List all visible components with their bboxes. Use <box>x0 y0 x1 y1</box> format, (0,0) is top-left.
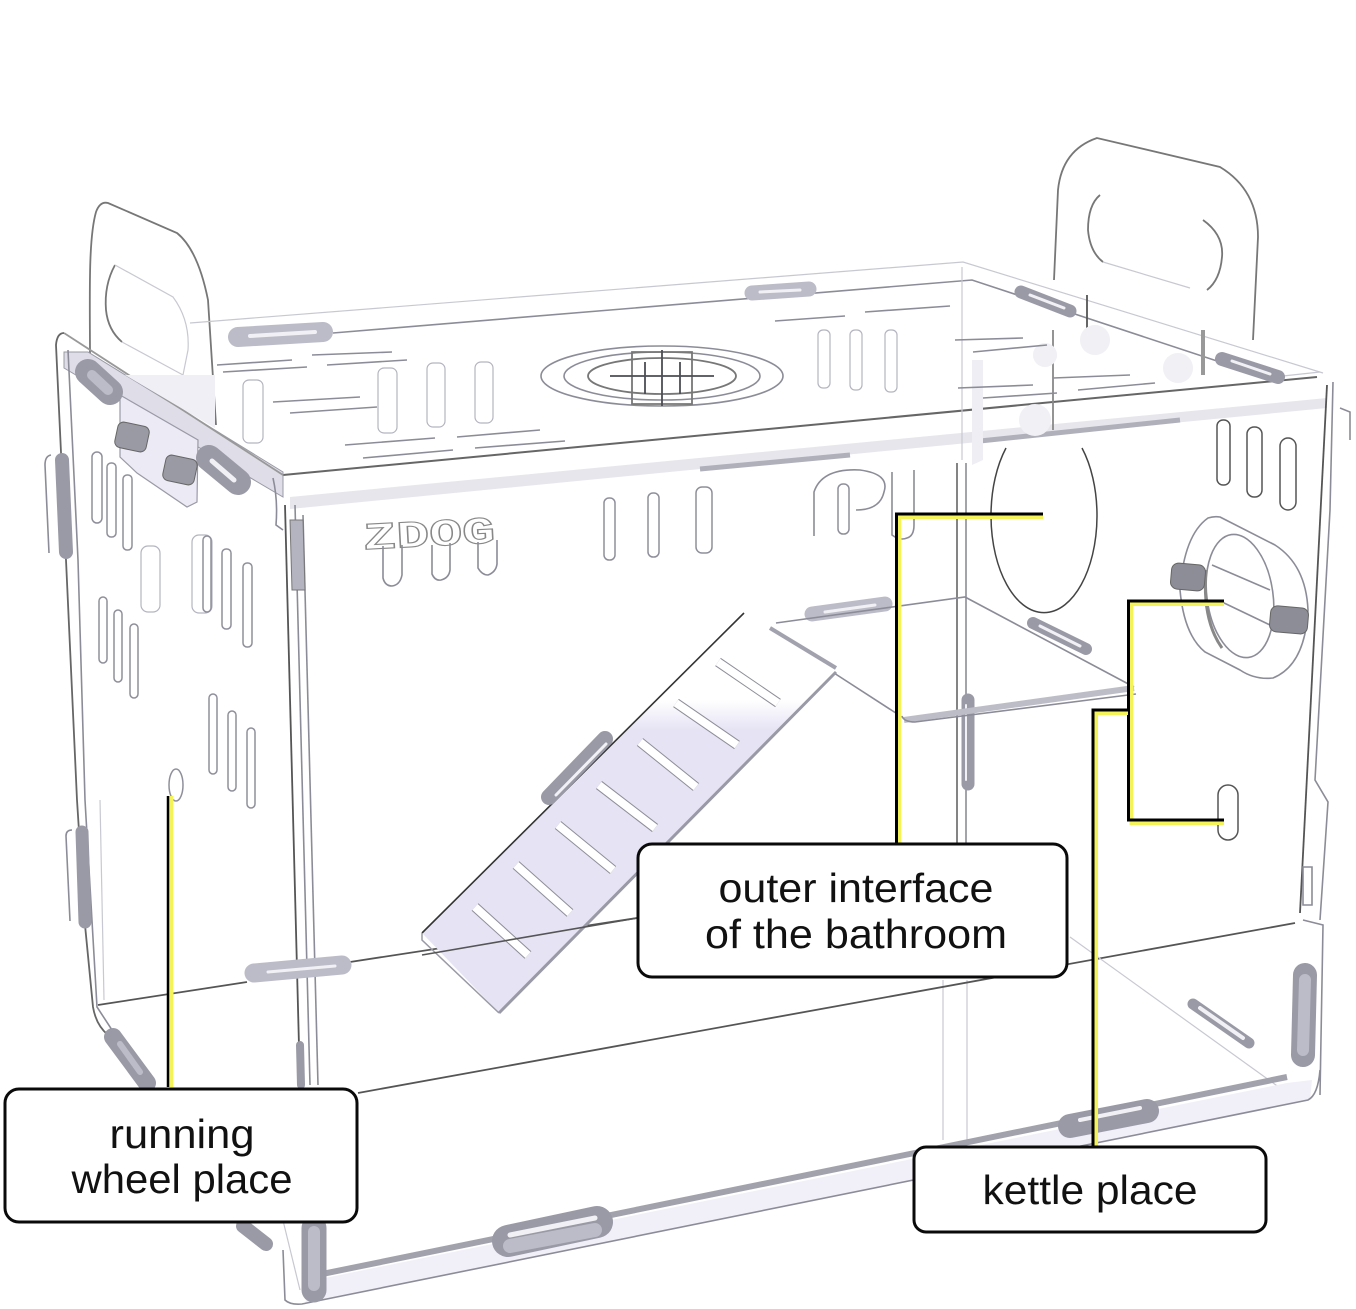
lid front edge <box>290 398 1327 509</box>
vent pattern on lid <box>217 306 1155 458</box>
lid tabs <box>238 289 1278 377</box>
lid left edge <box>64 352 283 497</box>
rear corner posts <box>943 267 1203 1140</box>
callout: running wheel place: wheel place <box>70 1156 292 1202</box>
bracket screws <box>114 421 198 486</box>
callout: running wheel place <box>5 1089 357 1222</box>
pointer: running wheel place <box>168 796 171 1087</box>
ZDOG logo and front vents: ZDOG <box>362 512 496 561</box>
lid back edges <box>190 262 1323 373</box>
callout: outer interface of the bathroom <box>638 844 1067 977</box>
bathroom opening <box>991 448 1097 613</box>
upper left tabs <box>62 372 238 1083</box>
ZDOG logo and front vents <box>362 470 914 586</box>
ramp tab <box>549 739 606 797</box>
pointer: outer interface of the bathroom <box>896 514 1043 845</box>
ramp <box>422 613 836 1013</box>
pointer: kettle place <box>1093 710 1128 1150</box>
right wall <box>1300 382 1350 1095</box>
left handle <box>90 203 216 425</box>
interior tabs <box>254 604 1086 973</box>
connector tabs <box>62 289 1305 1290</box>
handle bracket plate <box>120 375 215 507</box>
right wall vents <box>1217 420 1296 840</box>
callout: kettle place: kettle place <box>982 1167 1198 1213</box>
reflections on lid <box>1019 325 1193 436</box>
callout: outer interface of the bathroom: of the bathroom <box>705 911 1007 957</box>
round port with screws <box>1170 517 1309 678</box>
right handle <box>1054 138 1258 340</box>
pointer: wheel port bracket <box>1128 601 1224 823</box>
callout: kettle place <box>914 1147 1266 1232</box>
fan logo <box>541 346 783 406</box>
ramp slots <box>475 662 778 955</box>
left wall vents <box>92 452 255 808</box>
cage lid <box>64 262 1327 509</box>
front left post <box>273 478 318 1085</box>
upper platform <box>776 597 1136 722</box>
left wall <box>45 333 148 1085</box>
callout: outer interface of the bathroom: outer interface <box>718 865 994 911</box>
callout: running wheel place: running <box>110 1111 254 1157</box>
cage floor <box>98 918 1320 1304</box>
floor tabs <box>243 975 1305 1290</box>
